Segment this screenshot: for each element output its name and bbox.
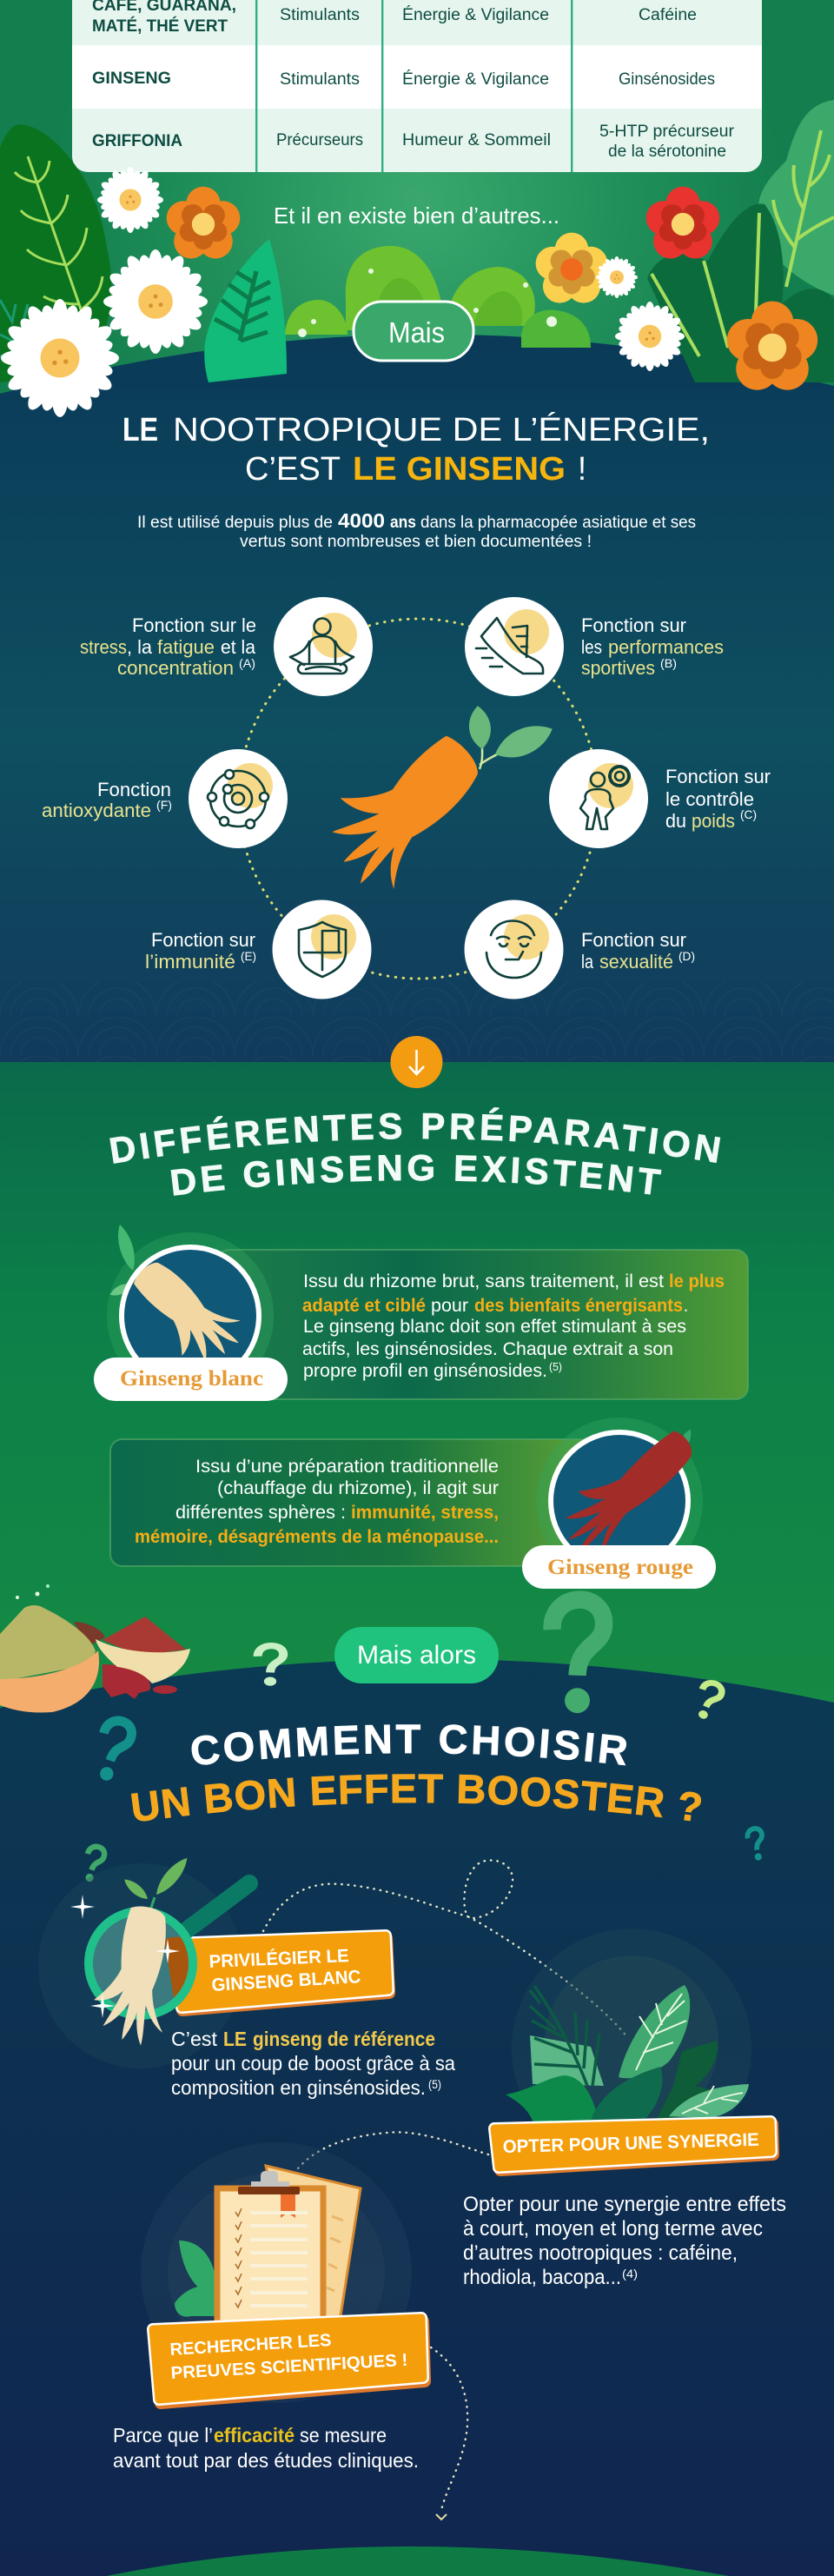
text: ginseng rouge description: (chauffage du rhizome), il agit sur <box>217 1478 499 1498</box>
heading: différentes préparation de ginseng existent: DIFFÉRENTES PRÉPARATION <box>109 1107 721 1164</box>
text: ginseng blanc description <box>302 1271 725 1381</box>
table: nootropics: Précurseurs <box>276 131 363 149</box>
text: ginseng de référence: ginseng de référence <box>253 2028 435 2050</box>
table: nootropics: 5-HTP précurseur <box>599 123 735 141</box>
intro paragraph: dans la pharmacopée asiatique et ses <box>420 514 696 532</box>
label pill: ginseng rouge: Ginseng rouge <box>547 1556 693 1579</box>
icon: running shoe <box>465 597 564 696</box>
table: nootropics: GRIFFONIA <box>92 132 182 150</box>
text: ginseng rouge description: immunité, stress, <box>351 1503 499 1523</box>
illustration: powder bowls <box>0 1584 190 1713</box>
flower: red <box>646 187 719 258</box>
label pill: ginseng blanc: Ginseng blanc <box>120 1367 263 1391</box>
dotted ring <box>238 619 598 979</box>
text: ginseng de référence <box>171 2028 455 2099</box>
label: sexualité: (D) <box>678 949 695 963</box>
label: antioxydante <box>42 779 172 821</box>
green section background <box>0 1062 834 1723</box>
dotted path: first to second step <box>263 1861 627 2037</box>
illustration: ginseng blanc <box>107 1225 274 1358</box>
illustration: synergy leaves <box>506 1929 751 2168</box>
label: antioxydante: (F) <box>156 798 172 812</box>
flower: orange big <box>727 302 817 390</box>
text: ginseng blanc description: Issu du rhizome brut, sans traitement, il est <box>303 1271 664 1291</box>
label: contrôle du poids: poids <box>692 810 735 832</box>
label: contrôle du poids: du <box>665 810 686 832</box>
text: efficacité: avant tout par des études cliniques. <box>113 2449 419 2472</box>
table: nootropics <box>72 0 762 172</box>
text: efficacité <box>113 2424 419 2472</box>
text: ginseng de référence: composition en ginsénosides. <box>171 2076 426 2099</box>
label: rechercher les preuves scientifiques: PREUVES SCIENTIFIQUES ! <box>170 2351 408 2383</box>
label: sexualité: la <box>581 951 594 973</box>
label: stress fatigue concentration: concentration <box>117 657 234 679</box>
text: ginseng de référence: C’est <box>171 2028 218 2050</box>
badge: mais: Mais <box>388 316 445 349</box>
table: nootropics: Énergie & Vigilance <box>402 70 549 89</box>
text: synergy description: Opter pour une synergie entre effets <box>463 2193 786 2216</box>
table: nootropics: Stimulants <box>280 6 360 24</box>
label: privilégier le ginseng blanc: GINSENG BLANC <box>211 1967 361 1995</box>
label: immunité: l’immunité <box>145 951 235 973</box>
label: performances sportives: (B) <box>660 656 677 670</box>
icon: body and gear <box>549 749 648 848</box>
flower: yellow <box>536 233 607 303</box>
label: immunité: (E) <box>241 949 256 963</box>
table: nootropics: Humeur & Sommeil <box>402 131 551 149</box>
question mark: upper-left green <box>81 1845 106 1883</box>
badge: mais <box>354 302 473 361</box>
text: ginseng blanc description: adapté et ciblé <box>302 1296 426 1316</box>
button: down arrow <box>391 1036 443 1088</box>
heading: comment choisir un bon effet booster <box>130 1724 702 1822</box>
label: privilégier le ginseng blanc: PRIVILÉGIER LE <box>208 1946 349 1972</box>
label: contrôle du poids: (C) <box>740 807 757 821</box>
intro paragraph: 4000 <box>338 509 385 532</box>
question mark: right lime <box>693 1680 724 1722</box>
heading: comment choisir un bon effet booster: COMMENT CHOISIR <box>191 1724 626 1766</box>
label: performances sportives: Fonction sur <box>581 614 686 636</box>
flower: daisy medium <box>103 249 208 354</box>
text: efficacité: se mesure <box>300 2424 387 2447</box>
flower: daisy small left <box>97 167 163 233</box>
intro paragraph: Il est utilisé depuis plus de <box>137 514 333 532</box>
heading: le nootropique de l'énergie: C’EST <box>245 451 341 488</box>
text: ginseng rouge description: Issu d’une préparation traditionnelle <box>195 1457 499 1477</box>
text: ginseng blanc description: Le ginseng blanc doit son effet stimulant à ses <box>303 1317 686 1337</box>
top green background <box>0 0 834 417</box>
label: immunité <box>145 929 256 973</box>
text: et il en existe bien d'autres: Et il en existe bien d’autres... <box>274 202 559 229</box>
label: sexualité: sexualité <box>599 951 673 973</box>
table: nootropics: de la sérotonine <box>608 143 726 161</box>
text: ginseng rouge description: mémoire, désagréments de la ménopause... <box>135 1527 499 1547</box>
heading: le nootropique de l'énergie: ! <box>578 451 586 488</box>
label: antioxydante: antioxydante <box>42 800 151 821</box>
text: ginseng blanc description: . <box>684 1296 688 1316</box>
label: performances sportives: les <box>581 636 602 658</box>
plants: centre bushes <box>285 246 591 348</box>
heading: différentes préparation de ginseng existent: DE GINSENG EXISTENT <box>170 1154 662 1196</box>
icon: shield <box>273 900 372 999</box>
flower: orange <box>167 187 240 258</box>
label: antioxydante: Fonction <box>97 779 171 800</box>
label: sexualité: Fonction sur <box>581 929 686 951</box>
plants: right foliage <box>647 100 834 382</box>
text: ginseng rouge description <box>135 1457 499 1547</box>
label: stress fatigue concentration: fatigue <box>157 636 215 658</box>
text: ginseng blanc description: pour <box>431 1296 468 1316</box>
magnifier halo <box>38 1863 243 2068</box>
text: synergy description <box>463 2193 786 2289</box>
illustration: ginseng rouge <box>536 1414 706 1584</box>
icon: smiling face <box>464 900 563 999</box>
text: ginseng de référence: pour un coup de boost grâce à sa <box>171 2052 455 2075</box>
label pill: ginseng blanc <box>94 1358 288 1401</box>
text: synergy description: d’autres nootropiques : caféine, <box>463 2241 738 2265</box>
label: stress fatigue concentration: stress <box>80 636 127 658</box>
label: immunité: Fonction sur <box>151 929 255 951</box>
navy section background <box>0 335 834 1064</box>
label: contrôle du poids: le contrôle <box>665 788 754 810</box>
icon: antioxidant atom <box>189 749 288 848</box>
label: rechercher les preuves scientifiques: RECHERCHER LES <box>169 2331 332 2360</box>
table: nootropics: GINSENG <box>92 70 171 88</box>
heading: comment choisir un bon effet booster: UN BON EFFET BOOSTER ? <box>130 1774 702 1822</box>
text: synergy description: rhodiola, bacopa... <box>463 2266 621 2289</box>
intro paragraph <box>137 509 696 551</box>
label: stress fatigue concentration: Fonction sur le <box>132 614 256 636</box>
text: ginseng blanc description: le plus <box>669 1271 725 1291</box>
label: sexualité <box>581 929 695 973</box>
intro paragraph: vertus sont nombreuses et bien documentées ! <box>240 533 592 551</box>
label: performances sportives: performances <box>608 636 724 658</box>
pill: mais alors <box>334 1627 499 1683</box>
text: ginseng blanc description: (5) <box>549 1360 562 1373</box>
illustration: white ginseng in magnifier <box>70 1858 258 2046</box>
heading: le nootropique de l'énergie: LE <box>122 412 158 448</box>
text: ginseng de référence: LE <box>223 2028 247 2050</box>
central ginseng root with leaves <box>308 705 558 903</box>
text: ginseng blanc description: actifs, les ginsénosides. Chaque extrait a son <box>302 1339 673 1359</box>
dotted arrow: to bottom <box>431 2347 467 2520</box>
question mark: small light <box>258 1646 283 1686</box>
question mark: left teal <box>92 1717 135 1784</box>
heading: le nootropique de l'énergie: NOOTROPIQUE DE L’ÉNERGIE, <box>173 411 710 448</box>
text: synergy description: (4) <box>622 2267 638 2281</box>
label: contrôle du poids: Fonction sur <box>665 766 771 787</box>
card: ginseng blanc text panel <box>217 1250 748 1399</box>
label: performances sportives: sportives <box>581 657 655 679</box>
heading: le nootropique de l'énergie: LE GINSENG <box>353 451 566 488</box>
label: rechercher les preuves scientifiques <box>153 2318 425 2403</box>
icon: meditation <box>274 597 373 696</box>
label pill: ginseng rouge <box>522 1545 716 1589</box>
text: ginseng blanc description: des bienfaits énergisants <box>474 1296 683 1316</box>
text: ginseng de référence: (5) <box>428 2077 441 2091</box>
navy lower section background <box>0 1659 834 2576</box>
question mark: right teal <box>746 1828 766 1862</box>
card: ginseng rouge text panel <box>110 1439 632 1566</box>
plants: left foliage <box>0 124 287 382</box>
label: contrôle du poids <box>665 766 771 832</box>
intro paragraph: ans <box>390 514 416 532</box>
label: privilégier le ginseng blanc <box>171 1935 389 2010</box>
flower: small daisy right <box>596 256 638 298</box>
label: opter pour une synergie <box>494 2121 773 2170</box>
label: stress fatigue concentration: et la <box>221 636 256 658</box>
dotted path: second to third step <box>298 2132 488 2168</box>
heading: le nootropique de l'énergie <box>122 411 710 488</box>
pill: mais alors: Mais alors <box>357 1641 476 1670</box>
table: nootropics: Énergie & Vigilance <box>402 6 549 24</box>
table: nootropics: Stimulants <box>280 70 360 89</box>
bottom green hill <box>106 2546 729 2576</box>
label: opter pour une synergie: OPTER POUR UNE SYNERGIE <box>502 2130 759 2157</box>
text: ginseng rouge description: différentes sphères : <box>175 1503 346 1523</box>
label: stress fatigue concentration <box>80 614 256 679</box>
text: efficacité: efficacité <box>214 2424 295 2447</box>
table: nootropics: MATÉ, THÉ VERT <box>92 17 228 36</box>
question mark: big <box>553 1600 604 1713</box>
label: stress fatigue concentration: (A) <box>239 656 255 670</box>
illustration: clipboard with leaves <box>141 2142 412 2403</box>
flower: daisy right <box>615 302 685 371</box>
label: stress fatigue concentration: , la <box>127 636 153 658</box>
text: efficacité: Parce que l’ <box>113 2424 213 2447</box>
table: nootropics: Caféine <box>639 6 697 24</box>
flower: daisy large <box>1 299 119 417</box>
text: ginseng blanc description: propre profil en ginsénosides. <box>303 1361 547 1381</box>
text: synergy description: à court, moyen et long terme avec <box>463 2217 763 2241</box>
table: nootropics: Ginsénosides <box>619 70 715 89</box>
label: performances sportives <box>581 614 724 679</box>
